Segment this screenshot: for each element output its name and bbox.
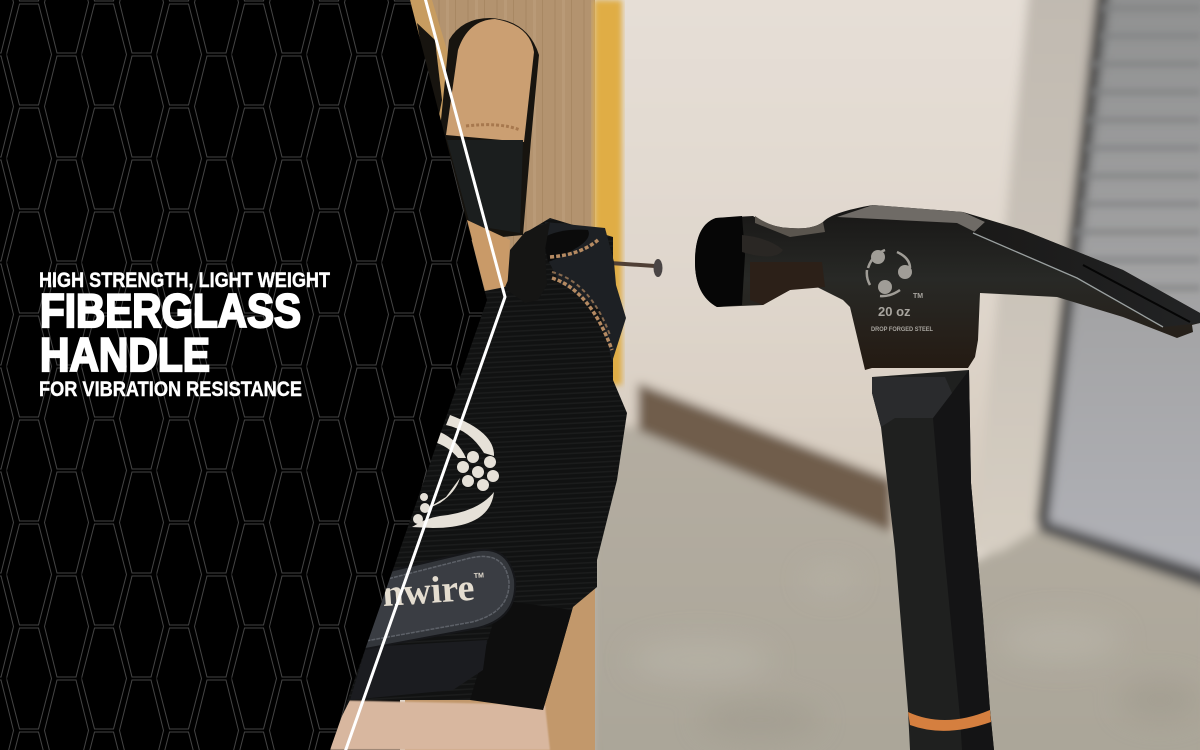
orange band: [908, 710, 991, 731]
claw: [973, 222, 1200, 327]
badge: TM: [474, 572, 484, 580]
strap: [470, 600, 572, 710]
black hexagon panel: [0, 0, 487, 750]
claw top strip: [837, 205, 985, 232]
subtitle: FOR VIBRATION RESISTANCE: [39, 378, 302, 401]
icon: logo on glove: [412, 415, 499, 528]
title block: [39, 269, 330, 401]
knuckle palm: [545, 222, 626, 362]
arm skin: [330, 700, 550, 750]
hammer head: [695, 205, 1200, 370]
nail: [610, 259, 662, 277]
badge wordmark: Ironwire: [331, 567, 476, 619]
icon: logo on hammer: [867, 250, 912, 296]
wooden post: [405, 0, 622, 750]
glove: [300, 0, 627, 720]
handle: [872, 370, 994, 750]
kicker: HIGH STRENGTH, LIGHT WEIGHT: [39, 269, 330, 292]
hand body: [300, 218, 627, 720]
hammer markings: TM: [913, 293, 923, 300]
photo: workshop background: [400, 0, 1200, 750]
thumb fold: [507, 222, 550, 303]
hammer markings: [871, 293, 933, 333]
badge: [331, 550, 515, 650]
heading line one: FIBERGLASS: [40, 284, 301, 337]
finger: [405, 0, 539, 290]
poll highlights: [695, 216, 745, 307]
hammer markings: DROP FORGED STEEL: [871, 326, 933, 333]
heading line two: HANDLE: [40, 328, 210, 381]
hammer markings: 20 oz: [878, 304, 911, 319]
door slats: [1068, 8, 1200, 288]
white chevron line: [345, 0, 505, 750]
hammer: [695, 205, 1200, 750]
